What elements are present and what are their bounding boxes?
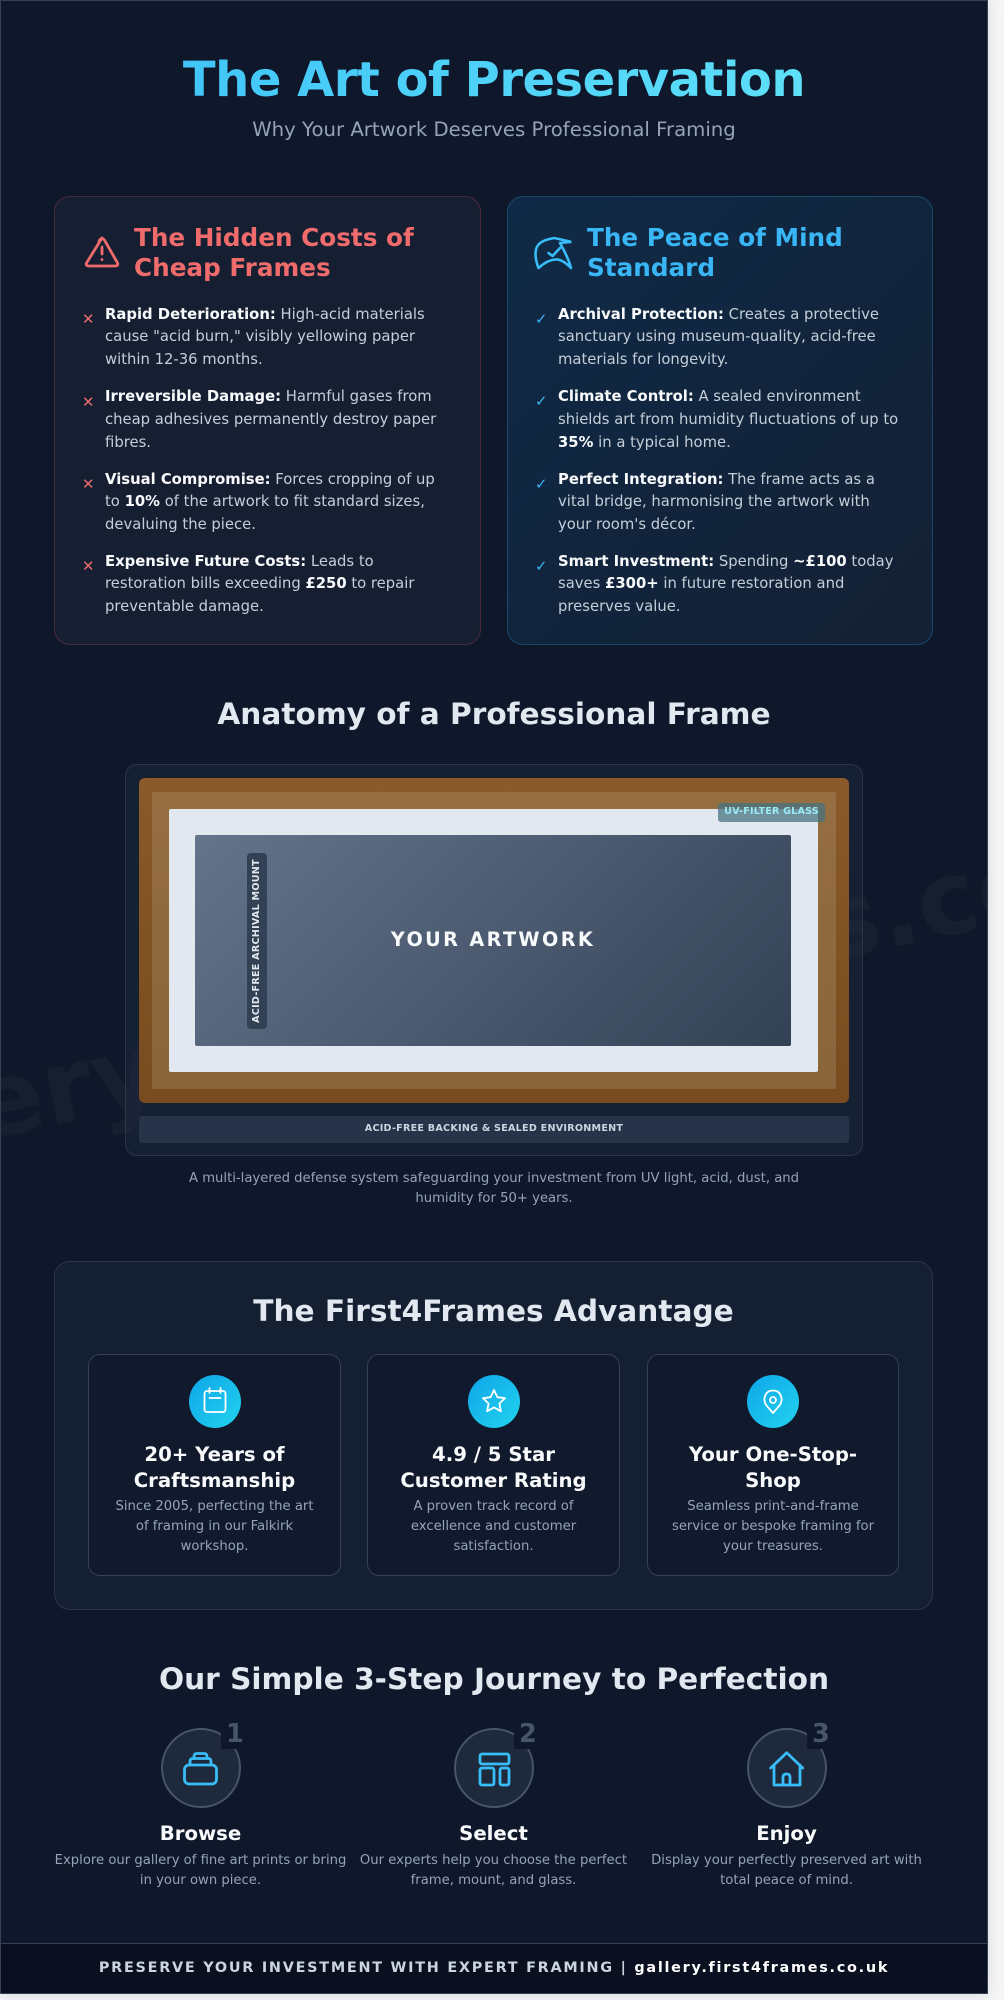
step text: Display your perfectly preserved art with bbox=[651, 1852, 922, 1868]
list item: future costs bbox=[105, 552, 414, 615]
card text: service or bespoke framing for bbox=[672, 1519, 874, 1534]
step number: 3 bbox=[812, 1719, 830, 1749]
panel: hidden costs bbox=[54, 196, 481, 645]
list item: climate control: shields art from humidity fluctuations of up to bbox=[558, 411, 898, 428]
icon: warning triangle bbox=[84, 236, 120, 268]
list item: future costs: restoration bills exceeding £250 to repair bbox=[105, 575, 414, 592]
card heading: Craftsmanship bbox=[134, 1468, 295, 1492]
subtitle: Why Your Artwork Deserves Professional Framing bbox=[252, 118, 736, 141]
list item: perfect integration: your room's décor. bbox=[558, 516, 696, 533]
caption: A multi-layered defense system safeguarding your investment from UV light, acid, dust, and bbox=[189, 1171, 799, 1186]
heading: peace of mind bbox=[587, 223, 843, 282]
step number bbox=[221, 1722, 247, 1749]
marker: cross: ✕ bbox=[82, 558, 94, 575]
list item: irreversible damage: cheap adhesives permanently destroy paper bbox=[105, 411, 436, 428]
panel: advantage bbox=[54, 1261, 933, 1610]
step title: Select bbox=[459, 1822, 528, 1845]
step text bbox=[651, 1852, 922, 1888]
label: archival mount bbox=[247, 853, 267, 1029]
list item: smart investment bbox=[558, 552, 894, 615]
list item: visual compromise bbox=[105, 470, 435, 533]
step: browse bbox=[55, 1719, 346, 1888]
artwork bbox=[195, 835, 791, 1046]
list item: future costs: preventable damage. bbox=[105, 598, 264, 615]
card text: Since 2005, perfecting the art bbox=[115, 1499, 314, 1514]
step number bbox=[807, 1722, 833, 1749]
step text: Our experts help you choose the perfect bbox=[360, 1852, 627, 1868]
card heading bbox=[688, 1442, 857, 1492]
list item: smart investment: preserves value. bbox=[558, 598, 681, 615]
card: one stop bbox=[647, 1354, 899, 1576]
marker: check: ✓ bbox=[535, 558, 547, 574]
card heading bbox=[134, 1442, 295, 1492]
marker: cross: ✕ bbox=[82, 394, 94, 410]
heading: peace of mind: Standard bbox=[587, 252, 715, 282]
list item: visual compromise: to 10% of the artwork to fit standard sizes, bbox=[105, 493, 425, 510]
label: uv filter glass bbox=[718, 803, 825, 822]
list item: future costs: Expensive Future Costs: Leads to bbox=[105, 552, 374, 570]
card text bbox=[115, 1499, 314, 1554]
heading: peace of mind: The Peace of Mind bbox=[587, 223, 843, 252]
footer text: PRESERVE YOUR INVESTMENT WITH EXPERT FRAMING | gallery.first4frames.co.uk bbox=[99, 1960, 889, 1976]
backing bar: ACID-FREE BACKING & SEALED ENVIRONMENT bbox=[365, 1123, 623, 1134]
artwork label: YOUR ARTWORK bbox=[391, 928, 595, 951]
list item: smart investment: saves £300+ in future restoration and bbox=[558, 575, 844, 592]
card text: of framing in our Falkirk bbox=[136, 1519, 293, 1534]
card text: excellence and customer bbox=[411, 1519, 576, 1534]
panel: peace of mind bbox=[507, 196, 933, 645]
list item: rapid deterioration bbox=[105, 306, 425, 368]
step number bbox=[514, 1722, 540, 1749]
step circle bbox=[161, 1728, 241, 1808]
heading: advantage: The First4Frames Advantage bbox=[253, 1294, 734, 1328]
step number: 2 bbox=[519, 1719, 537, 1749]
list item: rapid deterioration: cause "acid burn," visibly yellowing paper bbox=[105, 328, 415, 345]
label: archival mount: ACID-FREE ARCHIVAL MOUNT bbox=[251, 859, 262, 1023]
step: select bbox=[360, 1719, 627, 1888]
caption: humidity for 50+ years. bbox=[415, 1191, 573, 1206]
marker: check: ✓ bbox=[535, 310, 547, 328]
heading: hidden costs bbox=[134, 223, 414, 282]
card heading: 4.9 / 5 Star bbox=[432, 1442, 555, 1466]
list item: rapid deterioration: within 12-36 months. bbox=[105, 351, 263, 368]
list item: perfect integration: Perfect Integration: The frame acts as a bbox=[558, 470, 875, 488]
card heading: Customer Rating bbox=[400, 1468, 587, 1492]
list item: perfect integration: vital bridge, harmonising the artwork with bbox=[558, 493, 870, 510]
white mount bbox=[169, 809, 818, 1072]
step number: 1 bbox=[226, 1719, 244, 1749]
list item: visual compromise: devaluing the piece. bbox=[105, 516, 256, 533]
card heading bbox=[400, 1442, 587, 1492]
list item: rapid deterioration: Rapid Deterioration: High-acid materials bbox=[105, 306, 425, 322]
heading: hidden costs: Cheap Frames bbox=[134, 252, 331, 282]
card: years bbox=[88, 1354, 341, 1576]
list item: irreversible damage: fibres. bbox=[105, 434, 151, 451]
card: rating bbox=[367, 1354, 620, 1576]
step title: Browse bbox=[160, 1822, 241, 1845]
card text: Seamless print-and-frame bbox=[687, 1499, 859, 1514]
backing bar bbox=[139, 1116, 849, 1143]
step text bbox=[360, 1852, 627, 1888]
card text bbox=[672, 1499, 874, 1554]
list item: visual compromise: Visual Compromise: Forces cropping of up bbox=[105, 470, 435, 488]
heading: journey: Our Simple 3-Step Journey to Perfection bbox=[159, 1662, 829, 1696]
marker: check: ✓ bbox=[535, 476, 547, 492]
heading: anatomy: Anatomy of a Professional Frame bbox=[217, 697, 771, 731]
step text bbox=[55, 1852, 346, 1888]
card heading: Your One-Stop- bbox=[689, 1442, 857, 1466]
caption bbox=[189, 1171, 799, 1206]
panel: frame anatomy bbox=[125, 764, 863, 1156]
card heading: 20+ Years of bbox=[144, 1442, 285, 1466]
list item: climate control bbox=[558, 388, 898, 451]
card heading: Shop bbox=[745, 1468, 801, 1492]
list item: archival protection: materials for longevity. bbox=[558, 351, 728, 368]
list item: climate control: 35% in a typical home. bbox=[558, 434, 731, 451]
card text: workshop. bbox=[181, 1539, 248, 1554]
list item: archival protection: Archival Protection: Creates a protective bbox=[558, 306, 879, 322]
step text: Explore our gallery of fine art prints or bring bbox=[55, 1852, 346, 1868]
marker: check: ✓ bbox=[535, 393, 547, 410]
step title: Enjoy bbox=[756, 1822, 817, 1845]
icon: shield check bbox=[534, 236, 572, 270]
marker: cross: ✕ bbox=[82, 476, 94, 493]
label: uv filter glass: UV-FILTER GLASS bbox=[724, 806, 819, 817]
icon: star bbox=[468, 1375, 520, 1428]
title bbox=[1, 50, 987, 110]
list item: archival protection: sanctuary using museum-quality, acid-free bbox=[558, 328, 876, 345]
heading: hidden costs: The Hidden Costs of bbox=[134, 223, 414, 252]
step circle bbox=[747, 1728, 827, 1808]
step text: in your own piece. bbox=[140, 1872, 261, 1888]
step text: frame, mount, and glass. bbox=[411, 1872, 576, 1888]
card text bbox=[411, 1499, 576, 1554]
step: enjoy bbox=[651, 1719, 922, 1888]
list item: irreversible damage bbox=[105, 388, 436, 451]
list item: archival protection bbox=[558, 306, 879, 368]
list item: perfect integration bbox=[558, 470, 875, 533]
card text: A proven track record of bbox=[413, 1499, 574, 1514]
icon: map pin bbox=[747, 1375, 799, 1428]
card text: your treasures. bbox=[723, 1539, 823, 1554]
card text: satisfaction. bbox=[453, 1539, 534, 1554]
list item: smart investment: Smart Investment: Spending ~£100 today bbox=[558, 552, 894, 570]
list item: climate control: Climate Control: A sealed environment bbox=[558, 388, 861, 405]
marker: cross: ✕ bbox=[82, 311, 94, 328]
footer bbox=[1, 1943, 987, 1993]
step circle bbox=[454, 1728, 534, 1808]
frame inner bevel bbox=[152, 792, 836, 1089]
icon: calendar bbox=[189, 1375, 241, 1428]
step text: total peace of mind. bbox=[720, 1872, 853, 1888]
outer frame bbox=[139, 778, 849, 1103]
list item: irreversible damage: Irreversible Damage: Harmful gases from bbox=[105, 388, 432, 405]
